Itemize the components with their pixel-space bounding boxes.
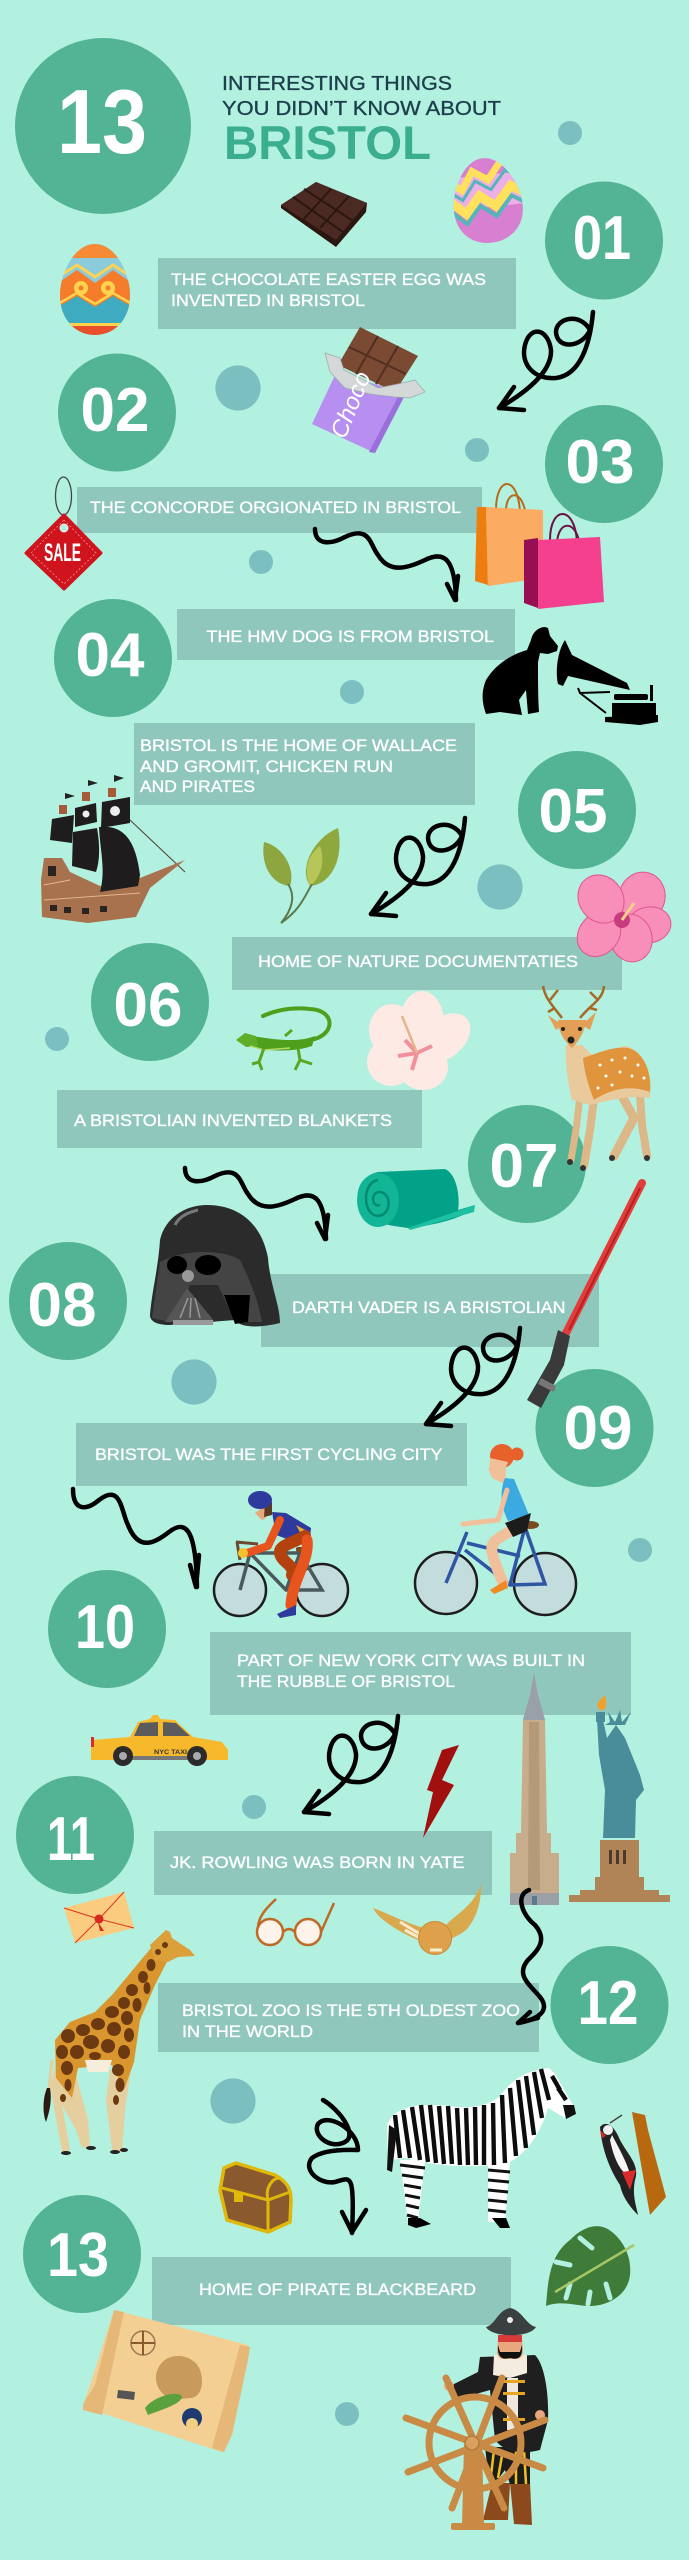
panel: fact 10: JK. ROWLING WAS BORN IN YATE bbox=[170, 1854, 464, 1872]
number badge 10: 10 bbox=[75, 1593, 135, 1662]
title: INTERESTING THINGS bbox=[222, 72, 452, 95]
panel: fact 4: BRISTOL IS THE HOME OF WALLACE bbox=[140, 737, 457, 755]
panel: fact 12: HOME OF PIRATE BLACKBEARD bbox=[199, 2281, 476, 2299]
icon: orange easter egg bbox=[58, 242, 132, 337]
icon: deer bbox=[543, 986, 650, 1171]
arrow: curly, fact 4 to 5 bbox=[371, 818, 465, 916]
number badge 11 bbox=[16, 1776, 134, 1894]
panel: fact 9 bbox=[210, 1632, 631, 1715]
icon: chrysler building bbox=[510, 1673, 559, 1905]
panel: fact 11 bbox=[158, 1983, 539, 2052]
icon: sealed envelope bbox=[64, 1892, 134, 1943]
number badge 08: 08 bbox=[28, 1271, 96, 1340]
panel: fact 10 bbox=[154, 1831, 492, 1895]
arrow: wavy, fact 2 to 3 bbox=[315, 529, 458, 600]
icon: chocolate bar in purple wrapper: Choco bbox=[326, 368, 377, 442]
icon: lightning bolt bbox=[423, 1745, 459, 1838]
number badge 04: 04 bbox=[76, 621, 145, 690]
panel: fact 1 bbox=[158, 258, 516, 329]
number badge 06: 06 bbox=[114, 971, 182, 1040]
arrow: curly, fact 1 to 2 bbox=[499, 312, 593, 410]
icon: hmv dog and gramophone bbox=[483, 627, 658, 725]
number badge 10 bbox=[48, 1570, 166, 1688]
icon: round glasses bbox=[257, 1899, 334, 1945]
number badge 01: 01 bbox=[573, 204, 631, 273]
icon: nyc taxi: NYC TAXI bbox=[154, 1749, 187, 1756]
panel: fact 8 bbox=[76, 1423, 467, 1486]
icon: pirate ship bbox=[41, 775, 185, 923]
arrow: vertical wave, fact 10 to 11 bbox=[518, 1890, 544, 2023]
number badge 09: 09 bbox=[564, 1394, 632, 1463]
panel: fact 8: BRISTOL WAS THE FIRST CYCLING CITY bbox=[95, 1446, 442, 1464]
title badge: 13 bbox=[15, 38, 191, 214]
icon: darth vader helmet bbox=[150, 1205, 280, 1326]
panel: fact 6 bbox=[57, 1090, 422, 1148]
panel: fact 4 bbox=[134, 723, 475, 805]
icon: statue of liberty bbox=[569, 1695, 670, 1902]
decorative dots bbox=[45, 121, 652, 2426]
panel: fact 6: A BRISTOLIAN INVENTED BLANKETS bbox=[74, 1112, 392, 1130]
panel: fact 3: THE HMV DOG IS FROM BRISTOL bbox=[206, 628, 494, 646]
panel: fact 2 bbox=[77, 487, 482, 533]
icon: nyc taxi bbox=[91, 1715, 228, 1766]
icon: lightsaber bbox=[527, 1183, 642, 1408]
title: YOU DIDN’T KNOW ABOUT bbox=[222, 97, 502, 120]
panel: fact 5: HOME OF NATURE DOCUMENTATIES bbox=[258, 953, 578, 971]
panel: fact 9: THE RUBBLE OF BRISTOL bbox=[237, 1673, 455, 1691]
panel: fact 5 bbox=[232, 937, 622, 990]
number badge 12: 12 bbox=[578, 1969, 638, 2038]
number badge 05 bbox=[518, 751, 636, 869]
icon: treasure chest bbox=[220, 2163, 291, 2232]
panel: fact 3 bbox=[177, 609, 515, 660]
icon: sale tag: SALE bbox=[44, 539, 81, 567]
icon: pink easter egg bbox=[454, 158, 523, 243]
icon: golden snitch bbox=[373, 1884, 481, 1954]
icon: pink hibiscus flower bbox=[568, 866, 674, 967]
panel: fact 11: BRISTOL ZOO IS THE 5TH OLDEST ZOO bbox=[182, 2002, 520, 2020]
icon: dark chocolate bar bbox=[281, 182, 367, 247]
panel: fact 7 bbox=[261, 1274, 599, 1347]
arrow: curly, fact 7 to 8 bbox=[426, 1328, 520, 1426]
number badge 07 bbox=[468, 1105, 586, 1223]
icon: chocolate bar in purple wrapper bbox=[312, 327, 425, 453]
panel: fact 12 bbox=[152, 2257, 511, 2325]
panel: fact 2: THE CONCORDE ORGIONATED IN BRISTOL bbox=[90, 499, 461, 517]
icon: woodpecker on branch bbox=[600, 2112, 666, 2215]
arrow: wavy, fact 6 to 7 bbox=[185, 1168, 328, 1239]
panel: fact 4: AND PIRATES bbox=[140, 778, 255, 796]
arrow: curly down, fact 11 to 12 bbox=[309, 2100, 366, 2233]
arrow: curly, fact 9 to 10 bbox=[304, 1716, 398, 1814]
icon: monstera leaf bbox=[546, 2226, 634, 2306]
panel: fact 7: DARTH VADER IS A BRISTOLIAN bbox=[292, 1299, 566, 1317]
title bbox=[222, 72, 502, 169]
number badge 04 bbox=[54, 599, 172, 717]
icon: rolled green blanket bbox=[357, 1169, 475, 1230]
number badge 13: 13 bbox=[47, 2221, 109, 2290]
arrow: wavy, fact 8 to 9 bbox=[73, 1489, 199, 1587]
icon: lizard bbox=[236, 1008, 330, 1070]
icon: zebra bbox=[387, 2068, 576, 2228]
icon: shopping bags bbox=[475, 484, 604, 609]
number badge 09 bbox=[536, 1369, 654, 1487]
icon: cyclist woman bbox=[415, 1444, 576, 1615]
number badge 11: 11 bbox=[47, 1805, 95, 1874]
number badge 01 bbox=[545, 182, 663, 300]
number badge 02 bbox=[58, 354, 176, 472]
icon: green leaves bbox=[263, 828, 340, 923]
number badge 02: 02 bbox=[81, 376, 149, 445]
panel: fact 1: INVENTED IN BRISTOL bbox=[171, 292, 365, 310]
icon: cyclist man bbox=[214, 1491, 348, 1618]
number badge 03 bbox=[545, 405, 663, 523]
icon: white hibiscus flower bbox=[367, 991, 480, 1090]
panel: fact 9: PART OF NEW YORK CITY WAS BUILT IN bbox=[237, 1652, 585, 1670]
number badge 07: 07 bbox=[490, 1132, 558, 1201]
number badge 05: 05 bbox=[539, 777, 607, 846]
number badge 08 bbox=[9, 1242, 127, 1360]
number badge 12 bbox=[550, 1946, 668, 2064]
number badge 06 bbox=[91, 943, 209, 1061]
icon: pirate at ship wheel bbox=[406, 2308, 548, 2530]
icon: sale tag bbox=[26, 477, 101, 589]
panel: fact 11: IN THE WORLD bbox=[182, 2023, 313, 2041]
icon: treasure map bbox=[83, 2310, 250, 2452]
number badge 03: 03 bbox=[566, 428, 634, 497]
panel: fact 4: AND GROMIT, CHICKEN RUN bbox=[140, 758, 393, 776]
title badge: 13: 13 bbox=[57, 72, 147, 173]
icon: giraffe bbox=[44, 1930, 195, 2155]
number badge 13 bbox=[23, 2195, 141, 2313]
panel: fact 1: THE CHOCOLATE EASTER EGG WAS bbox=[171, 271, 486, 289]
title: BRISTOL bbox=[224, 116, 431, 169]
